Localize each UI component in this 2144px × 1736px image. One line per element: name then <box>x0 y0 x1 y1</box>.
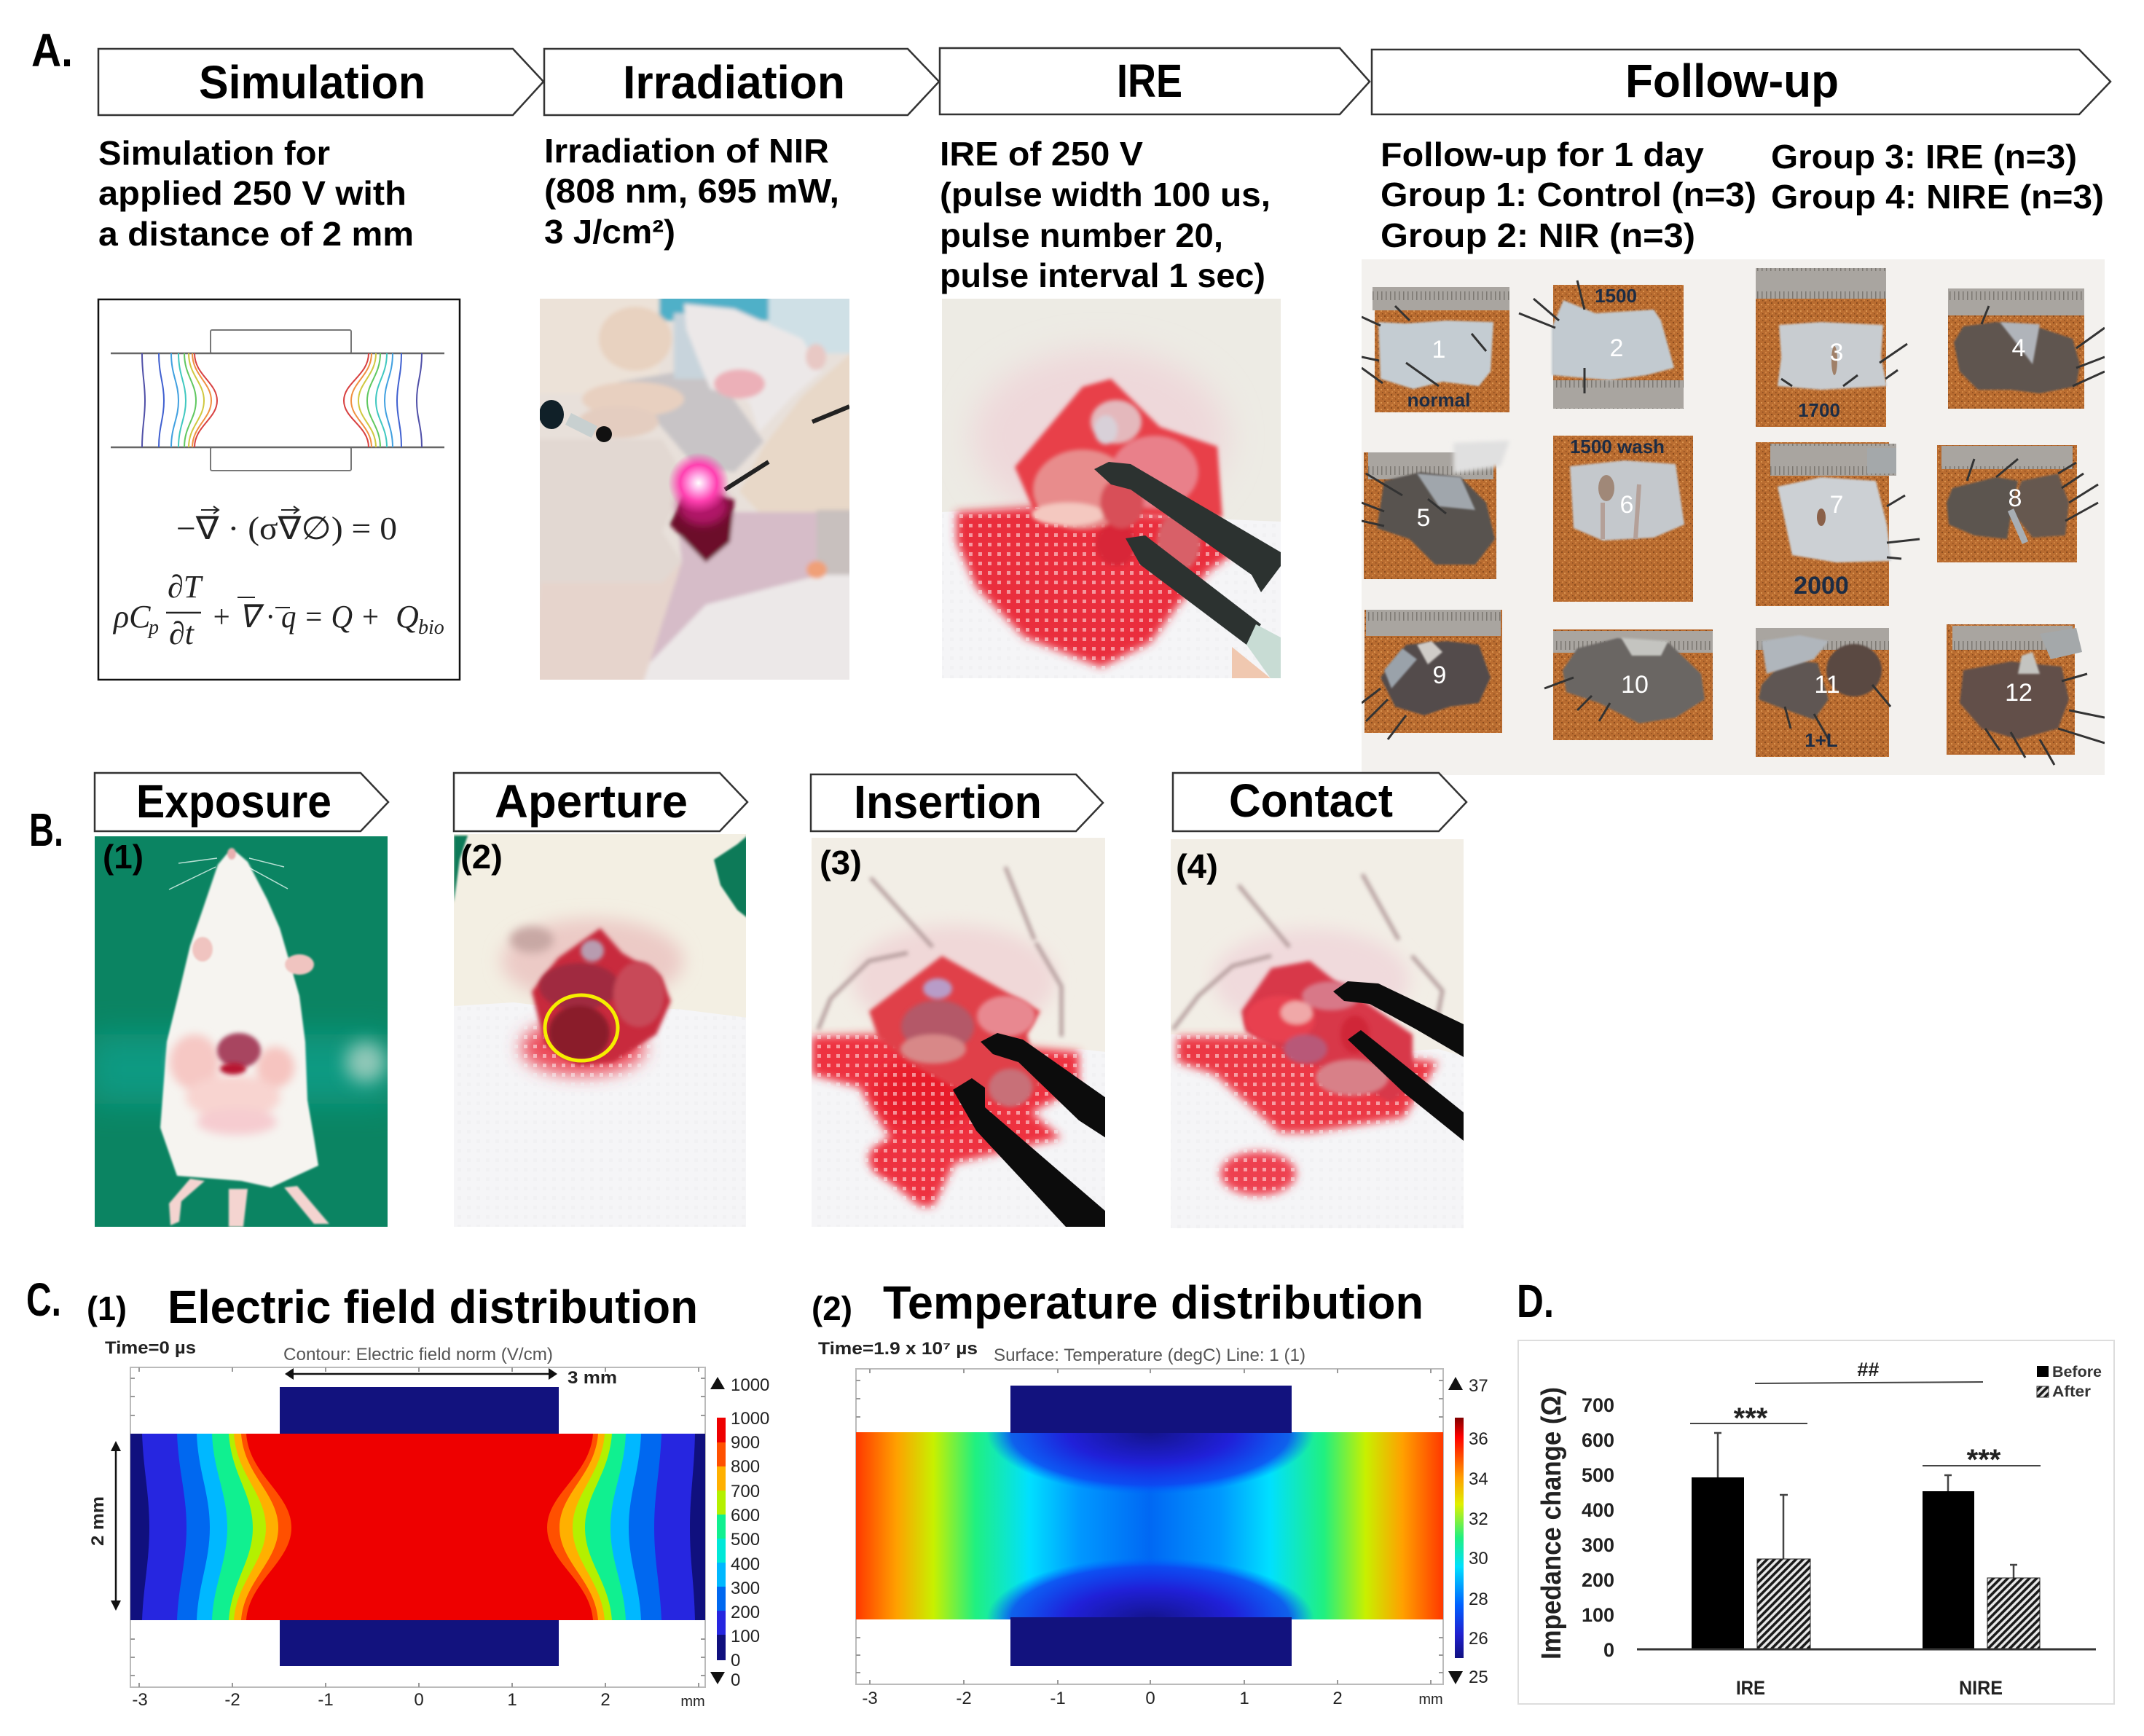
heading: temperature: (2) <box>812 1289 852 1327</box>
sample 11: 11 <box>1814 671 1840 699</box>
sample 3: 1700 <box>1798 399 1840 421</box>
photo labels: (1) <box>103 838 144 876</box>
colour scale <box>1448 1376 1488 1687</box>
x axis: -1 <box>1050 1689 1066 1708</box>
colour scale: 37 <box>1469 1376 1488 1396</box>
colour scale: 34 <box>1469 1469 1488 1489</box>
bars IRE <box>1692 1433 1810 1649</box>
photo labels: (2) <box>460 838 503 876</box>
equation: bioheat: ∂t <box>169 616 195 651</box>
colour scale: 0 <box>731 1651 740 1670</box>
panel C: simulation results <box>26 1273 1488 1710</box>
photo 2: aperture with yellow circle <box>454 834 747 1227</box>
equation: bioheat: bio <box>418 616 444 639</box>
photo 1: rat on green background <box>87 836 393 1227</box>
heading: temperature: Temperature distribution <box>883 1276 1424 1329</box>
panel D: impedance bar chart <box>1517 1275 2114 1704</box>
sample 2 <box>1519 280 1684 409</box>
y axis ticks: 600 <box>1582 1429 1614 1451</box>
colour scale: 1000 <box>731 1409 769 1429</box>
significance marks: *** <box>1967 1444 2001 1476</box>
arrow header: Exposure: Exposure <box>136 775 331 828</box>
sample 7: 7 <box>1830 491 1843 519</box>
panel B: surgical steps <box>29 773 1466 1228</box>
colour scale: 200 <box>731 1603 760 1622</box>
text: irradiation description: (808 nm, 695 mW, <box>544 172 839 210</box>
text: IRE description: pulse interval 1 sec) <box>940 256 1265 294</box>
significance marks: *** <box>1734 1402 1768 1434</box>
arrow header: Simulation: Simulation <box>199 56 425 109</box>
x axis: mm <box>680 1694 705 1710</box>
text: follow-up groups: Group 3: IRE (n=3) <box>1771 138 2077 176</box>
sample 3: 3 <box>1830 339 1843 366</box>
equation: bioheat: + ∇ · q = Q + <box>211 599 380 635</box>
text: irradiation description: Irradiation of NIR <box>544 132 829 170</box>
sample 9: 9 <box>1433 661 1446 689</box>
y axis ticks: 0 <box>1603 1639 1614 1661</box>
x axis: -2 <box>224 1690 240 1710</box>
chart: temperature surface <box>818 1339 1488 1708</box>
x axis: 0 <box>414 1690 424 1710</box>
y axis ticks: 700 <box>1582 1394 1614 1416</box>
x axis: 2 <box>1332 1689 1343 1708</box>
sample 4 <box>1948 288 2105 409</box>
colour scale: 30 <box>1469 1549 1488 1568</box>
y axis ticks: 100 <box>1582 1604 1614 1626</box>
sample 9 <box>1362 610 1502 739</box>
photo 3: insertion of probes <box>812 838 1106 1227</box>
x axis <box>1637 1648 2096 1651</box>
panel A: workflow <box>31 24 2110 775</box>
colour scale: 26 <box>1469 1629 1488 1649</box>
colour scale: 800 <box>731 1457 760 1477</box>
text: irradiation description <box>544 132 839 251</box>
arrow header: Irradiation: Irradiation <box>623 56 845 109</box>
y axis ticks: 200 <box>1582 1569 1614 1591</box>
text: irradiation description: 3 J/cm²) <box>544 213 675 251</box>
text: simulation description: Simulation for <box>98 134 330 172</box>
sample 1 <box>1362 287 1509 412</box>
colour scale: 400 <box>731 1555 760 1574</box>
colour scale: 32 <box>1469 1509 1488 1529</box>
sample 12 <box>1947 624 2105 765</box>
sample 11: 1+L <box>1805 729 1838 751</box>
sample 2: 1500 <box>1595 285 1637 307</box>
arrow header: Contact <box>1173 773 1466 831</box>
category labels <box>1736 1677 2003 1699</box>
3 mm arrow <box>285 1368 617 1388</box>
text: follow-up groups: Group 1: Control (n=3) <box>1381 176 1756 213</box>
sample 10: 10 <box>1621 671 1649 699</box>
arrow header: Irradiation <box>544 49 939 115</box>
photo labels: (4) <box>1176 847 1218 885</box>
legend: After <box>2052 1383 2091 1400</box>
sample 5 <box>1362 441 1509 579</box>
chart: temperature surface: Surface: Temperature (degC) Line: 1 (1) <box>994 1346 1305 1365</box>
category labels: IRE <box>1736 1677 1765 1699</box>
sample 8 <box>1937 445 2098 562</box>
heading: electric field: (1) <box>87 1289 127 1327</box>
text: follow-up groups: Group 4: NIRE (n=3) <box>1771 178 2104 216</box>
sample 4: 4 <box>2012 334 2025 362</box>
colour scale: 1000 <box>731 1375 769 1395</box>
x axis: -1 <box>318 1690 334 1710</box>
sample 1: normal <box>1407 389 1470 411</box>
legend: Before <box>2052 1364 2102 1380</box>
chart: electric field contour <box>88 1338 769 1710</box>
equation: bioheat: ∂T <box>168 569 204 605</box>
x axis: mm <box>1418 1692 1443 1708</box>
text: follow-up groups <box>1381 135 2104 254</box>
x axis: 0 <box>1145 1689 1155 1708</box>
sample 6: 1500 wash <box>1570 436 1665 457</box>
colour scale: 600 <box>731 1506 760 1525</box>
equation: bioheat: Q <box>396 599 419 635</box>
text: simulation description: applied 250 V with <box>98 174 407 212</box>
x axis: 1 <box>1239 1689 1249 1708</box>
x axis: 2 <box>600 1690 610 1710</box>
bars NIRE <box>1923 1475 2040 1649</box>
colour scale: 100 <box>731 1627 760 1646</box>
sample 5: 5 <box>1417 504 1430 532</box>
chart: electric field contour: Contour: Electric field norm (V/cm) <box>283 1345 553 1364</box>
arrow header: Insertion <box>811 774 1103 831</box>
photo: NIR irradiation of rat <box>532 291 852 685</box>
text: IRE description: pulse number 20, <box>940 216 1223 254</box>
arrow header: IRE <box>940 48 1370 114</box>
colour scale: 300 <box>731 1579 760 1598</box>
equation: bioheat: ρC <box>112 599 151 635</box>
colour scale: 25 <box>1469 1668 1488 1687</box>
equation: electric potential: −∇ · (σ∇∅) = 0 <box>176 511 397 546</box>
colour scale: 0 <box>731 1670 740 1690</box>
photo: follow-up tissue samples on cork boards <box>1362 259 2105 775</box>
arrow header: IRE: IRE <box>1117 55 1182 107</box>
arrow header: Simulation <box>98 49 543 115</box>
arrow header: Contact: Contact <box>1229 774 1393 827</box>
text: IRE description: IRE of 250 V <box>940 135 1143 173</box>
text: simulation description <box>98 134 414 253</box>
colour scale: 36 <box>1469 1429 1488 1449</box>
colour scale: 28 <box>1469 1590 1488 1609</box>
colour scale: 700 <box>731 1482 760 1501</box>
sample 7: 2000 <box>1794 572 1849 600</box>
x axis: 1 <box>507 1690 517 1710</box>
category labels: NIRE <box>1959 1677 2003 1699</box>
colour scale: 900 <box>731 1433 760 1453</box>
sample 2: 2 <box>1610 334 1623 362</box>
y axis ticks: 400 <box>1582 1499 1614 1521</box>
text: follow-up groups: Follow-up for 1 day <box>1381 135 1704 173</box>
panel letter C: C. <box>26 1273 61 1326</box>
simulation diagram box with equations <box>98 299 460 680</box>
photo labels: (3) <box>820 844 862 881</box>
sample 6: 6 <box>1620 491 1633 519</box>
heading: electric field: Electric field distribution <box>168 1281 698 1333</box>
significance marks <box>1690 1359 2041 1476</box>
legend <box>2037 1364 2102 1400</box>
photo: IRE probes on tissue <box>942 299 1281 678</box>
text: follow-up groups: Group 2: NIR (n=3) <box>1381 216 1695 254</box>
panel letter D: D. <box>1517 1275 1554 1327</box>
arrow header: Follow-up: Follow-up <box>1625 55 1839 107</box>
equation: bioheat <box>112 569 444 651</box>
chart: electric field contour: Time=0 µs <box>105 1338 196 1358</box>
y axis ticks: 300 <box>1582 1534 1614 1556</box>
arrow header: Aperture: Aperture <box>495 775 688 828</box>
3 mm arrow: 3 mm <box>568 1368 617 1388</box>
yellow circle <box>545 995 618 1061</box>
sample 11 <box>1756 628 1890 757</box>
y axis ticks: 500 <box>1582 1464 1614 1486</box>
x axis: -2 <box>956 1689 972 1708</box>
panel letter A: A. <box>31 24 73 76</box>
chart frame <box>1518 1340 2114 1704</box>
colour scale: 500 <box>731 1530 760 1550</box>
sample 7 <box>1756 442 1920 606</box>
sample 8: 8 <box>2008 484 2022 512</box>
y axis ticks <box>1582 1394 1614 1661</box>
arrow header: Aperture <box>454 773 747 831</box>
photo labels <box>103 838 1218 885</box>
equation: bioheat: p <box>147 616 159 639</box>
x axis: -3 <box>132 1690 148 1710</box>
significance marks: ## <box>1857 1359 1879 1380</box>
text: IRE description <box>940 135 1271 294</box>
colour scale <box>710 1375 769 1690</box>
text: IRE description: (pulse width 100 us, <box>940 176 1271 213</box>
x axis <box>862 1689 1443 1708</box>
sample 10 <box>1544 629 1713 740</box>
text: simulation description: a distance of 2 mm <box>98 215 414 253</box>
x axis: -3 <box>862 1689 878 1708</box>
chart: temperature surface: Time=1.9 x 10⁷ µs <box>818 1339 978 1359</box>
sample 1: 1 <box>1432 336 1445 364</box>
sample 6 <box>1553 436 1693 602</box>
arrow header: Follow-up <box>1372 50 2110 114</box>
photo 4: probes in contact <box>1171 839 1464 1228</box>
panel letter B: B. <box>29 804 63 856</box>
x axis <box>132 1690 705 1710</box>
2 mm arrow: 2 mm <box>88 1496 108 1546</box>
2 mm arrow <box>88 1441 121 1611</box>
y axis title: Impedance change (Ω) <box>1536 1387 1567 1660</box>
arrow header: Insertion: Insertion <box>854 776 1042 828</box>
sample 3 <box>1756 268 1907 427</box>
sample 12: 12 <box>2005 679 2033 707</box>
arrow header: Exposure <box>95 773 388 831</box>
